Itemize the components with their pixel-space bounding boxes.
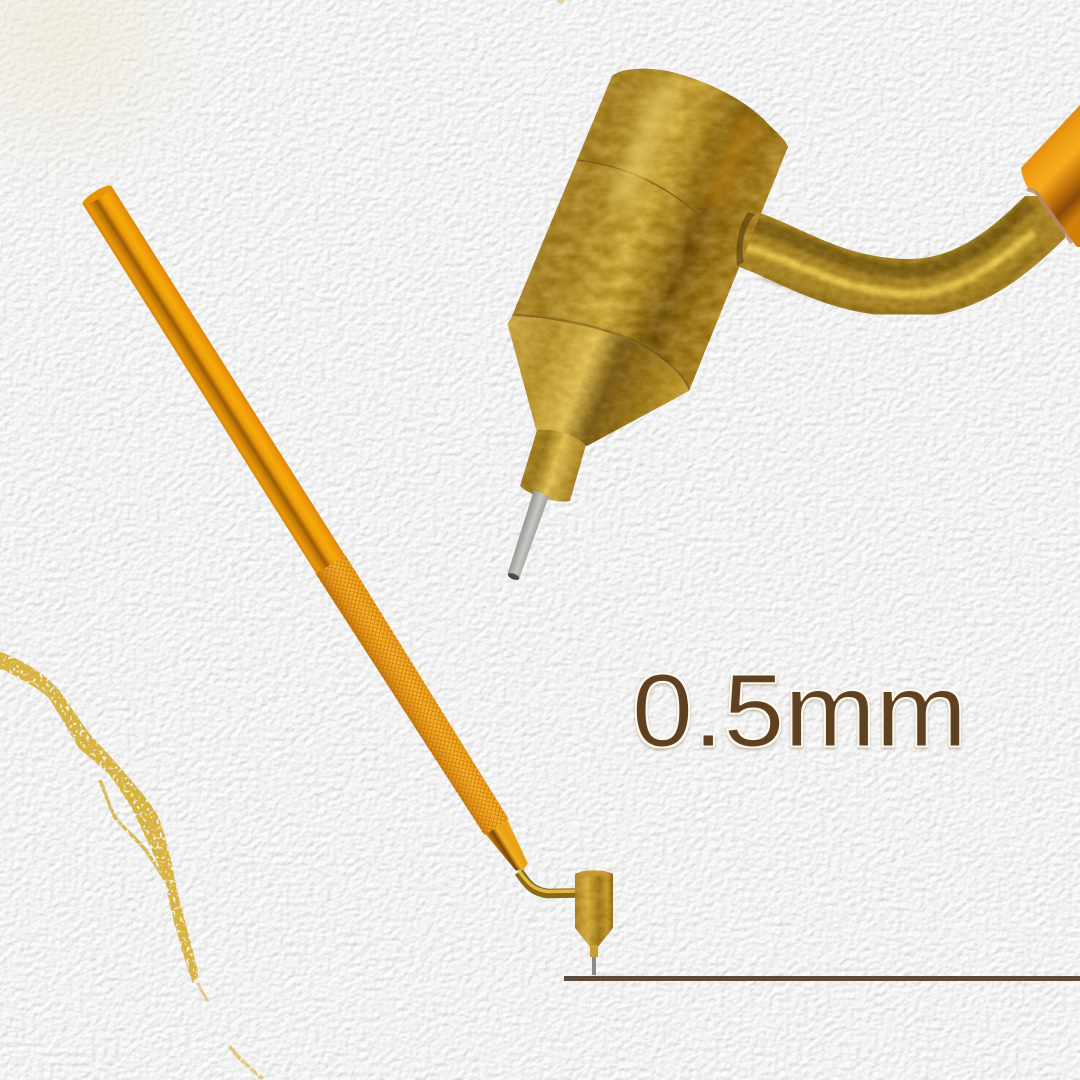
orange handle end xyxy=(1021,105,1080,247)
barrel xyxy=(83,186,346,576)
size label: 0.5mm xyxy=(632,653,967,768)
enlarged cylinder body xyxy=(512,69,788,391)
knurled grip xyxy=(316,555,511,837)
small brass arm xyxy=(519,871,577,894)
small brass head xyxy=(575,870,613,975)
enlarged cone xyxy=(508,316,689,446)
full tool: pen with orange handle and small brass head xyxy=(80,182,613,975)
orange handle xyxy=(80,182,538,879)
collar xyxy=(520,430,586,502)
needle xyxy=(507,490,549,581)
enlarged bent arm xyxy=(738,196,1065,314)
enlarged brass tip detail xyxy=(507,69,1080,581)
baseline rule xyxy=(564,976,1080,981)
tapered cone xyxy=(486,820,534,876)
gold paint streak xyxy=(0,653,263,1079)
